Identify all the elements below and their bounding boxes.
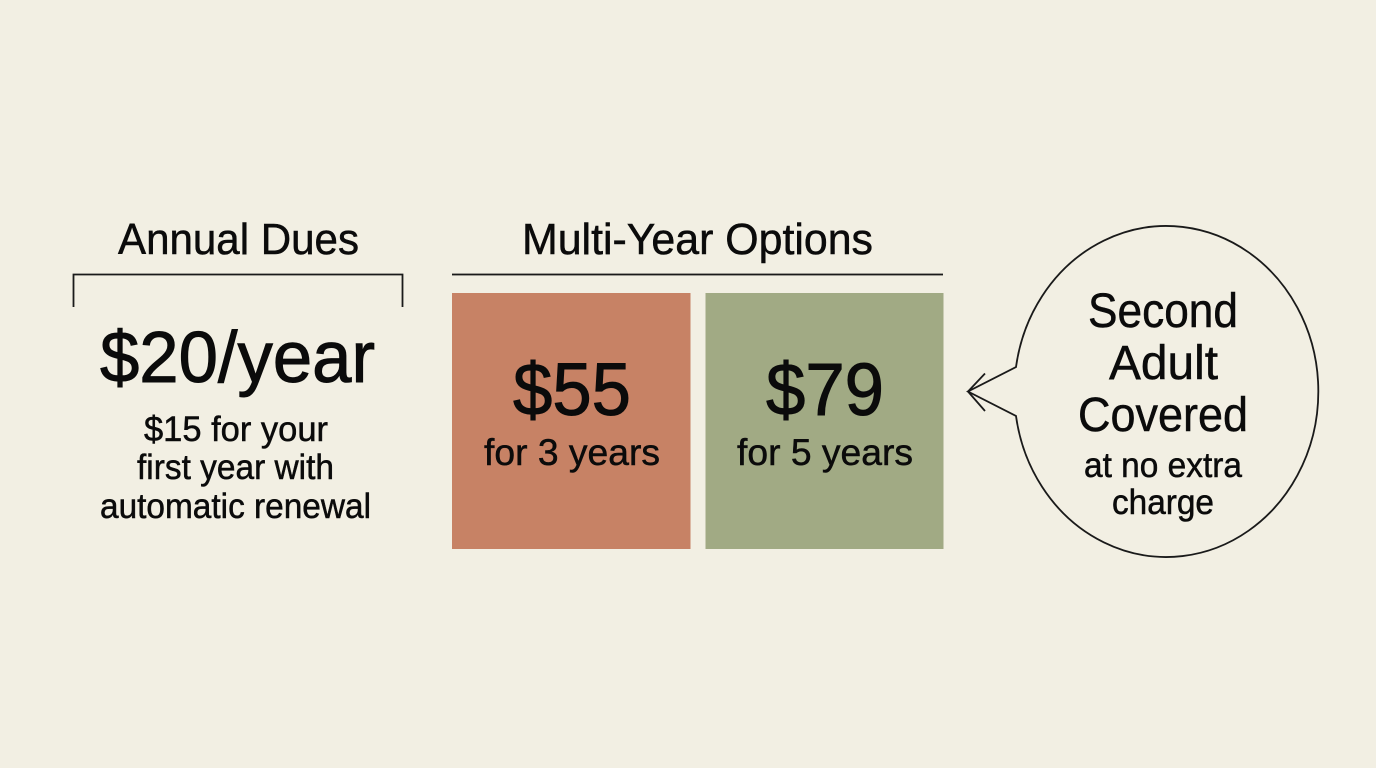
annual price: $20/year: [100, 318, 375, 398]
heading: multi-year options: Multi-Year Options: [522, 215, 873, 264]
card: 5 year option: [706, 293, 944, 549]
panel: multi-year options: [452, 215, 944, 549]
callout sub text: charge: [1112, 483, 1214, 522]
callout main text: Covered: [1078, 389, 1248, 442]
term: 5 years: for 5 years: [737, 432, 913, 473]
callout: second adult speech bubble: [968, 226, 1318, 557]
heading: annual dues: Annual Dues: [118, 215, 359, 264]
first year offer text: [100, 410, 371, 526]
bubble outline with pointer: [968, 226, 1318, 557]
callout main text: Second: [1088, 285, 1238, 338]
term: 3 years: for 3 years: [484, 432, 660, 473]
first year offer text: automatic renewal: [100, 487, 371, 526]
callout sub text: [1084, 446, 1242, 522]
callout main text: Adult: [1109, 337, 1218, 390]
price: $79: $79: [766, 348, 884, 431]
heading rule: [452, 274, 943, 275]
arrow head barbs: [968, 374, 985, 411]
card: 3 year option: [452, 293, 690, 549]
bracket above annual price: [74, 274, 402, 307]
callout sub text: at no extra: [1084, 446, 1242, 485]
panel: annual dues: [74, 215, 402, 526]
first year offer text: first year with: [137, 448, 334, 487]
first year offer text: $15 for your: [144, 410, 328, 449]
price: $55: $55: [513, 348, 631, 431]
callout main text: [1078, 285, 1248, 442]
